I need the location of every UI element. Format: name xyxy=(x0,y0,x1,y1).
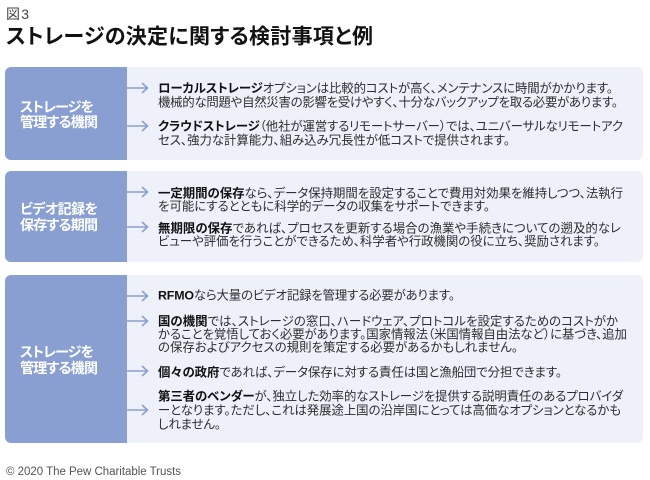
text: individual governments: 個々の政府であれば、データ保存に対する責任は国と漁船団で分担できます。 xyxy=(158,364,562,380)
arrow: national agency xyxy=(127,316,148,326)
text: third-party vendors: 第三者のベンダーが、独立した効率的なストレージを提供する説明責任のあるプロバイダ xyxy=(158,388,623,404)
text: cloud storage: クラウドストレージ（他社が運営するリモートサーバー）では、ユニバーサルなリモートアク xyxy=(158,118,623,134)
panel label: ストレージを xyxy=(20,344,94,360)
arrow: fixed-term retention xyxy=(127,187,148,197)
text: national agency xyxy=(158,314,627,354)
arrow: local storage xyxy=(127,83,148,93)
text: indefinite retention: ビューや評価を行うことができるため、科学者や行政機関の役に立ち、奨励されます。 xyxy=(158,234,600,248)
panel background xyxy=(5,67,643,160)
panel label: 管理する機関 xyxy=(20,114,98,130)
text: fixed-term retention: 一定期間の保存なら、データ保持期間を設定することで費用対効果を維持しつつ、法執行 xyxy=(158,186,623,200)
text: cloud storage xyxy=(158,118,623,148)
arrow: third-party vendors xyxy=(127,405,148,415)
arrow: individual governments xyxy=(127,366,148,376)
text: local storage: ローカルストレージオプションは比較的コストが高く、メンテナンスに時間がかかります。 xyxy=(158,80,613,96)
panel label: ビデオ記録を xyxy=(20,201,98,217)
text: national agency: の保存およびアクセスの規則を策定する必要があるかもしれません。 xyxy=(158,340,518,354)
panel label: 保存する期間 xyxy=(20,217,98,233)
panel label block xyxy=(5,67,127,160)
text: national agency: 国の機関では、ストレージの窓口、ハードウェア、プロトコルを設定するためのコストがか xyxy=(158,314,618,328)
title: ストレージの決定に関する検討事項と例 xyxy=(6,24,373,48)
arrow: RFMO xyxy=(127,291,148,301)
panel label: 管理する機関 xyxy=(20,360,98,376)
panel: storage managing organization 2 xyxy=(5,275,643,443)
text: indefinite retention: 無期限の保存であれば、プロセスを更新する場合の漁業や手続きについての遡及的なレ xyxy=(158,220,621,236)
panel: video retention period xyxy=(5,171,643,262)
text: third-party vendors: しれません。 xyxy=(158,418,221,432)
text: fixed-term retention xyxy=(158,186,623,214)
panel label block xyxy=(5,275,127,443)
text: local storage xyxy=(158,80,618,110)
text: third-party vendors xyxy=(158,388,623,432)
panel background xyxy=(5,171,643,262)
panel label block xyxy=(5,171,127,262)
text: cloud storage: セス、強力な計算能力、組み込み冗長性が低コストで提供されます。 xyxy=(158,132,510,148)
footer credit: © 2020 The Pew Charitable Trusts xyxy=(6,466,181,478)
panel label: ストレージを xyxy=(20,99,94,115)
text: fixed-term retention: を可能にするとともに科学的データの収集をサポートできます。 xyxy=(158,198,490,214)
arrow: cloud storage xyxy=(127,121,148,131)
text: RFMO: RFMOなら大量のビデオ記録を管理する必要があります。 xyxy=(158,288,455,302)
text: local storage: 機械的な問題や自然災害の影響を受けやすく、十分なバックアップを取る必要があります。 xyxy=(158,94,618,110)
panel background xyxy=(5,275,643,443)
arrow: indefinite retention xyxy=(127,222,148,232)
text: third-party vendors: ーとなります。ただし、これは発展途上国の沿岸国にとっては高価なオプションとなるかも xyxy=(158,404,621,418)
text: indefinite retention xyxy=(158,220,621,248)
figure number: 図3 xyxy=(6,6,29,22)
panel: storage managing organization 1 xyxy=(5,67,643,160)
text: national agency: かることを覚悟しておく必要があります。国家情報法（米国情報自由法など）に基づき、追加 xyxy=(158,326,627,342)
